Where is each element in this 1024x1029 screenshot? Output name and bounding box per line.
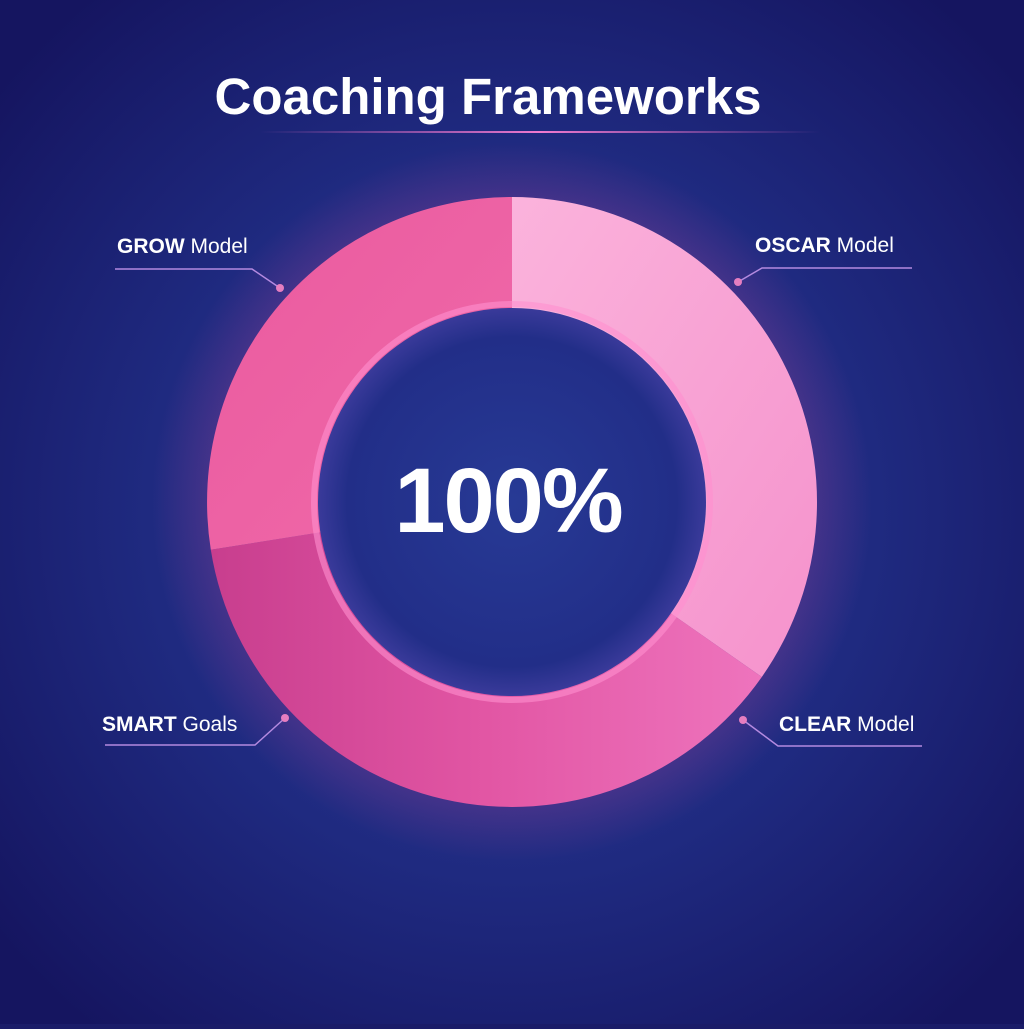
title: Coaching Frameworks: [215, 68, 761, 125]
segment: CLEAR and SMART: [211, 532, 762, 807]
label: GROW Model: [115, 235, 284, 292]
label: OSCAR Model: OSCAR Model: [755, 234, 894, 257]
segment: GROW Model: [207, 197, 512, 550]
label: SMART Goals: SMART Goals: [102, 713, 237, 736]
label: OSCAR Model: [734, 234, 912, 286]
label: GROW Model: GROW Model: [117, 235, 248, 258]
label: CLEAR Model: [739, 713, 922, 746]
label: CLEAR Model: CLEAR Model: [779, 713, 914, 736]
segment: OSCAR Model: [512, 197, 817, 677]
donut chart: [207, 197, 817, 807]
label: SMART Goals: [102, 713, 289, 745]
center value: 100%: [394, 450, 622, 552]
